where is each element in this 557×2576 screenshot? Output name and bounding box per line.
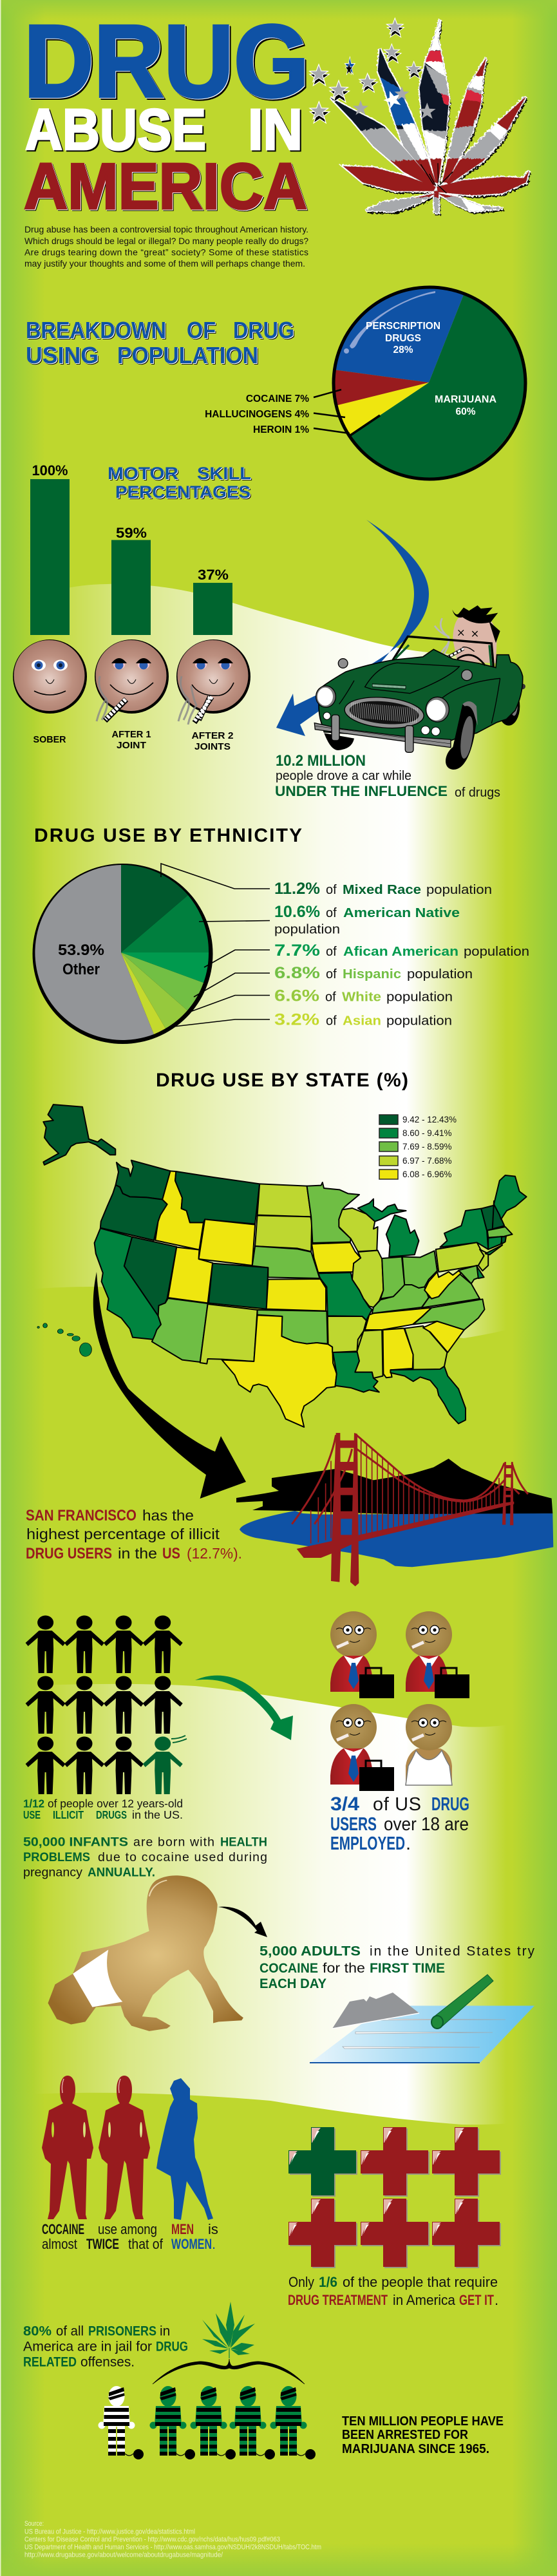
map legend: 8.60 - 9.41% [402, 1128, 452, 1138]
front wheels [324, 733, 354, 750]
callout: 5,000 adults: FIRST TIME [370, 1961, 445, 1976]
callout: 5,000 adults: COCAINE [260, 1961, 318, 1976]
callout: 1/12 use illicit drugs: in the US. [132, 1808, 183, 1821]
callout: cocaine use among men and women: use among [98, 2221, 157, 2237]
bay water [240, 1511, 553, 1567]
pictogram: workers [330, 1611, 469, 1791]
callout: 1/12 use illicit drugs: USE [23, 1808, 41, 1821]
title line: DRUG: DRUG [24, 3, 309, 118]
callout: 3/4 of drug users employed: EMPLOYED [330, 1833, 405, 1854]
map legend: 6.97 - 7.68% [402, 1156, 452, 1166]
callout: cocaine use among men and women: MEN [171, 2221, 194, 2237]
face labels: AFTER 1 [112, 729, 151, 740]
Hawaii [37, 1323, 91, 1356]
line: white: population [386, 990, 453, 1005]
callout: 80% of prisoners: 80% [23, 2324, 52, 2339]
face: after two joints [176, 639, 250, 724]
callout: San Francisco: (12.7%). [187, 1545, 242, 1562]
title line: AMERICA: AMERICA [24, 151, 307, 223]
heading: breakdown of drug using population: USING [26, 342, 99, 368]
pictogram: 1 in 12 people [26, 1615, 187, 1794]
rear wheel [498, 687, 520, 726]
callout: 5,000 adults: for the [323, 1961, 365, 1976]
intro paragraph: may justify your thoughts and some of them will perhaps change them. [24, 258, 305, 269]
callout: 3/4 of drug users employed [330, 1794, 469, 1854]
car body [319, 649, 523, 741]
line: hispanic: Hispanic [343, 967, 401, 981]
map legend [379, 1115, 457, 1179]
callout: San Francisco: DRUG USERS [26, 1545, 112, 1562]
bracket: curly brace above prisoners [153, 2359, 305, 2384]
leader lines [161, 864, 270, 1027]
callout: ten million arrested: BEEN ARRESTED FOR [342, 2428, 468, 2442]
icon: six medical crosses [288, 2127, 501, 2268]
line: white: of [325, 990, 336, 1005]
line: asian [274, 1011, 452, 1029]
diaper [73, 1949, 122, 2007]
callout: 50,000 infants: pregnancy [23, 1865, 82, 1879]
intro paragraph: Which drugs should be legal or illegal? Do many people really do drugs? [24, 236, 308, 246]
worker in tank top [406, 1704, 452, 1785]
man [42, 2076, 93, 2219]
sources: US Department of Health and Human Services - http://www.oas.samhsa.gov/NSDUH/2k8NSDUH/tabs/TOC.htm [24, 2544, 321, 2552]
line: american native [274, 903, 460, 936]
line: asian: Asian [343, 1014, 381, 1028]
map legend: 6.08 - 6.96% [402, 1170, 452, 1179]
pie chart: drug using population [205, 286, 525, 479]
cables [292, 1434, 528, 1524]
far tower [502, 1462, 513, 1525]
pie chart: drug use by ethnicity [32, 864, 270, 1044]
title line: ABUSE IN: IN [248, 98, 303, 162]
illustration: Golden Gate Bridge over San Francisco Bay [236, 1433, 553, 1586]
heading: motor skill percentages [108, 464, 251, 502]
callout: ten million arrested [342, 2414, 504, 2456]
callout: 5,000 adults: in the United States try [370, 1944, 534, 1959]
heading: motor skill percentages: PERCENTAGES [115, 482, 250, 502]
deck [297, 1502, 514, 1558]
face labels: JOINT [117, 740, 146, 751]
callout: 50,000 infants: ANNUALLY. [88, 1865, 155, 1879]
heading: breakdown of drug using population [26, 317, 294, 368]
bar chart: motor skills [30, 462, 232, 635]
line: asian: population [386, 1014, 452, 1028]
callout: San Francisco: US [162, 1545, 180, 1562]
line: american native: of [326, 906, 337, 920]
callout: 50,000 infants: are born with [133, 1835, 214, 1850]
pie labels: cocaine, hallucinogens, heroin [205, 393, 309, 435]
face: sober [13, 639, 87, 714]
line: mixed race: 11.2% [274, 880, 320, 898]
sources: http://www.drugabuse.gov/about/welcome/aboutdrugabuse/magnitude/ [24, 2552, 223, 2559]
pie label: marijuana: 60% [455, 406, 476, 417]
callout: 50,000 infants [23, 1835, 267, 1879]
heading: drug use by ethnicity: DRUG USE BY ETHNICITY [34, 825, 302, 846]
callout: 1/12 use illicit drugs: 1/12 [23, 1797, 44, 1810]
heading: motor skill percentages: SKILL [197, 464, 251, 483]
sources: Source: [24, 2520, 44, 2528]
title [24, 3, 309, 223]
callout: ten million arrested: MARIJUANA SINCE 1965. [342, 2442, 489, 2456]
callout: 50,000 infants: 50,000 INFANTS [23, 1835, 128, 1850]
callout: San Francisco [26, 1507, 242, 1562]
icon: two men and a woman silhouettes [42, 2076, 213, 2220]
pie labels: cocaine, hallucinogens, heroin: COCAINE 7% [246, 393, 309, 404]
callout: 1/6 get drug treatment: DRUG TREATMENT [288, 2292, 388, 2308]
title line: ABUSE IN: ABUSE [25, 98, 206, 162]
line: mixed race: Mixed Race [343, 883, 421, 897]
pictogram: five prisoners [98, 2386, 316, 2459]
intro paragraph: Are drugs tearing down the “great” society? Some of these statistics [24, 247, 308, 258]
arrow: blue swoosh into car [276, 520, 429, 736]
map legend: 9.42 - 12.43% [402, 1115, 457, 1124]
callout: 80% of prisoners: DRUG [156, 2339, 188, 2354]
contiguous states [95, 1160, 527, 1427]
man [99, 2076, 150, 2219]
icon: crawling baby [48, 1875, 243, 2031]
hood detail lines [339, 663, 500, 723]
icon: driver in green sports car [314, 605, 525, 770]
line: white: White [342, 990, 381, 1005]
driver [435, 605, 500, 663]
callout: 3/4 of drug users employed: of US [373, 1794, 421, 1815]
callout: 80% of prisoners: of all [56, 2324, 84, 2339]
callout: cocaine use among men and women: that of [128, 2236, 164, 2252]
face labels: SOBER [33, 734, 66, 745]
icon: small green cannabis leaf [202, 2302, 255, 2358]
line: american native: American Native [343, 906, 460, 920]
line: asian: of [326, 1014, 337, 1028]
callout: 3/4 of drug users employed: USERS [330, 1814, 377, 1835]
callout: cocaine use among men and women: TWICE [86, 2236, 119, 2252]
line: african american: population [464, 945, 529, 959]
callout: 1/12 use illicit drugs: ILLICIT [53, 1808, 84, 1821]
intro paragraph [24, 224, 308, 269]
callout: 1/6 get drug treatment [288, 2274, 498, 2308]
line: american native: 10.6% [274, 903, 320, 921]
callout: cocaine use among men and women: . [212, 2236, 216, 2252]
highlight on head [149, 1880, 167, 1897]
callout: cocaine use among men and women [42, 2221, 218, 2252]
callout: cocaine use among men and women: is [208, 2221, 218, 2237]
intro paragraph: Drug abuse has been a controversial topic throughout American history. [24, 224, 308, 234]
face labels: AFTER 2 [192, 730, 233, 741]
callout: 10.2 million drivers: 10.2 MILLION [276, 752, 366, 770]
line: asian: 3.2% [274, 1011, 319, 1029]
map legend: 7.69 - 8.59% [402, 1142, 452, 1151]
callout: San Francisco: highest percentage of illicit [26, 1526, 220, 1542]
line: mixed race [274, 880, 492, 898]
mirrors [338, 659, 348, 668]
line: hispanic: of [326, 967, 337, 981]
callout: 50,000 infants: HEALTH [220, 1835, 267, 1850]
arrow: black arrow from California to San Francisco [93, 1272, 246, 1499]
pie label: other: Other [62, 961, 100, 978]
callout: 1/12 use illicit drugs: DRUGS [96, 1808, 127, 1821]
pie label: prescription drugs: PERSCRIPTION [366, 321, 440, 332]
callout: 1/6 get drug treatment: GET IT [459, 2292, 494, 2308]
face labels: JOINTS [194, 741, 231, 752]
icon: mirror, razor blade and rolled bill [310, 1975, 534, 2063]
callout: 80% of prisoners [23, 2324, 188, 2370]
pie label: prescription drugs [366, 321, 440, 355]
callout: 3/4 of drug users employed: over 18 are [384, 1814, 469, 1835]
callout: 1/12 use illicit drugs: of people over 12 years-old [48, 1797, 183, 1810]
callout: 1/6 get drug treatment: 1/6 [319, 2274, 337, 2290]
callout: 10.2 million drivers: UNDER THE INFLUENCE [275, 783, 448, 799]
line: mixed race: of [326, 883, 337, 897]
line: african american: of [326, 945, 337, 959]
bar chart: motor skills: 37% [198, 567, 229, 583]
callout: 1/6 get drug treatment: Only [288, 2274, 314, 2290]
line: mixed race: population [426, 883, 492, 897]
callout: 1/6 get drug treatment: in America [393, 2292, 456, 2308]
line: african american [274, 942, 529, 960]
pie label: other: 53.9% [58, 942, 104, 959]
callout: cocaine use among men and women: COCAINE [42, 2221, 84, 2237]
hills [236, 1459, 552, 1515]
callout: 50,000 infants: PROBLEMS [23, 1850, 90, 1864]
callout: 80% of prisoners: in [160, 2324, 170, 2339]
line: hispanic: population [407, 967, 473, 981]
main tower [331, 1433, 359, 1586]
arrow: green curved arrow to workers [195, 1676, 293, 1740]
woman [156, 2078, 213, 2220]
Alaska [43, 1104, 115, 1165]
callout: San Francisco: in the [118, 1545, 157, 1562]
line: hispanic [274, 964, 473, 982]
callout: 3/4 of drug users employed: 3/4 [330, 1794, 359, 1815]
callout: 5,000 adults [260, 1944, 534, 1991]
callout: 10.2 million drivers [275, 752, 500, 800]
pie label: other [58, 942, 104, 978]
pie leader lines [314, 390, 350, 433]
grille [343, 694, 425, 731]
legend text: ethnicity percentages [274, 880, 529, 1029]
line: hispanic: 6.8% [274, 964, 320, 982]
bar chart: motor skills: 59% [116, 525, 147, 541]
sources: US Bureau of Justice - http://www.justice.gov/dea/statistics.html [24, 2528, 195, 2536]
heading: breakdown of drug using population: BREAKDOWN [26, 317, 166, 343]
bar chart: motor skills: 100% [32, 462, 68, 478]
callout: cocaine use among men and women: WOMEN [171, 2236, 212, 2252]
pie labels: cocaine, hallucinogens, heroin: HEROIN 1% [253, 424, 309, 435]
face labels [33, 729, 233, 752]
callout: 5,000 adults: 5,000 ADULTS [260, 1944, 361, 1959]
bumper [314, 723, 451, 748]
callout: 50,000 infants: due to cocaine used during [98, 1850, 267, 1864]
callout: ten million arrested: TEN MILLION PEOPLE HAVE [342, 2414, 504, 2429]
callout: 80% of prisoners: America are in jail for [23, 2339, 152, 2354]
callout: 80% of prisoners: offenses. [80, 2354, 135, 2370]
arrow: small black arrow from baby to cocaine stat [218, 1907, 267, 1937]
heading: breakdown of drug using population: DRUG [233, 317, 294, 343]
face: after one joint [95, 639, 169, 721]
callout: 10.2 million drivers: people drove a car while [276, 769, 411, 783]
callout: 80% of prisoners: RELATED [23, 2354, 77, 2370]
callout: 5,000 adults: EACH DAY [260, 1976, 326, 1991]
line: african american: 7.7% [274, 942, 320, 960]
faces: sober, one joint, two joints [13, 639, 250, 752]
callout: 1/6 get drug treatment: of the people that require [343, 2274, 498, 2290]
callout: 10.2 million drivers: of drugs [455, 786, 500, 800]
heading: drug use by state: DRUG USE BY STATE (%) [156, 1070, 408, 1091]
callout: 80% of prisoners: PRISONERS [88, 2324, 156, 2339]
pie label: prescription drugs: DRUGS [385, 333, 421, 344]
steering wheel [457, 655, 485, 665]
callout: cocaine use among men and women: almost [42, 2236, 77, 2252]
map: United States [37, 1104, 527, 1427]
line: white: 6.6% [274, 987, 319, 1005]
sources: Centers for Disease Control and Prevention - http://www.cdc.gov/nchs/data/hus/hus09.pdf#063 [24, 2536, 280, 2544]
sources [24, 2520, 321, 2559]
heading: breakdown of drug using population: OF [187, 317, 216, 343]
pie labels: cocaine, hallucinogens, heroin: HALLUCINOGENS 4% [205, 409, 309, 420]
line: african american: Afican American [343, 945, 458, 959]
heading: breakdown of drug using population: POPULATION [117, 342, 258, 368]
callout: 1/6 get drug treatment: . [495, 2292, 498, 2308]
pie label: prescription drugs: 28% [393, 345, 413, 355]
line: white [274, 987, 453, 1005]
callout: San Francisco: SAN FRANCISCO [26, 1507, 137, 1524]
callout: 3/4 of drug users employed: DRUG [431, 1794, 469, 1815]
pie label: marijuana: MARIJUANA [435, 394, 496, 405]
windshield [393, 636, 494, 668]
heading: motor skill percentages: MOTOR [108, 464, 178, 483]
callout: 1/12 use illicit drugs [23, 1797, 183, 1821]
pie label: marijuana [435, 394, 496, 417]
line: american native: population [274, 922, 340, 936]
callout: 3/4 of drug users employed: . [406, 1833, 411, 1854]
icon: American flag cannabis leaf with stars [309, 13, 536, 214]
suspender ropes [311, 1439, 499, 1544]
callout: San Francisco: has the [142, 1507, 194, 1524]
headlights [316, 686, 335, 707]
